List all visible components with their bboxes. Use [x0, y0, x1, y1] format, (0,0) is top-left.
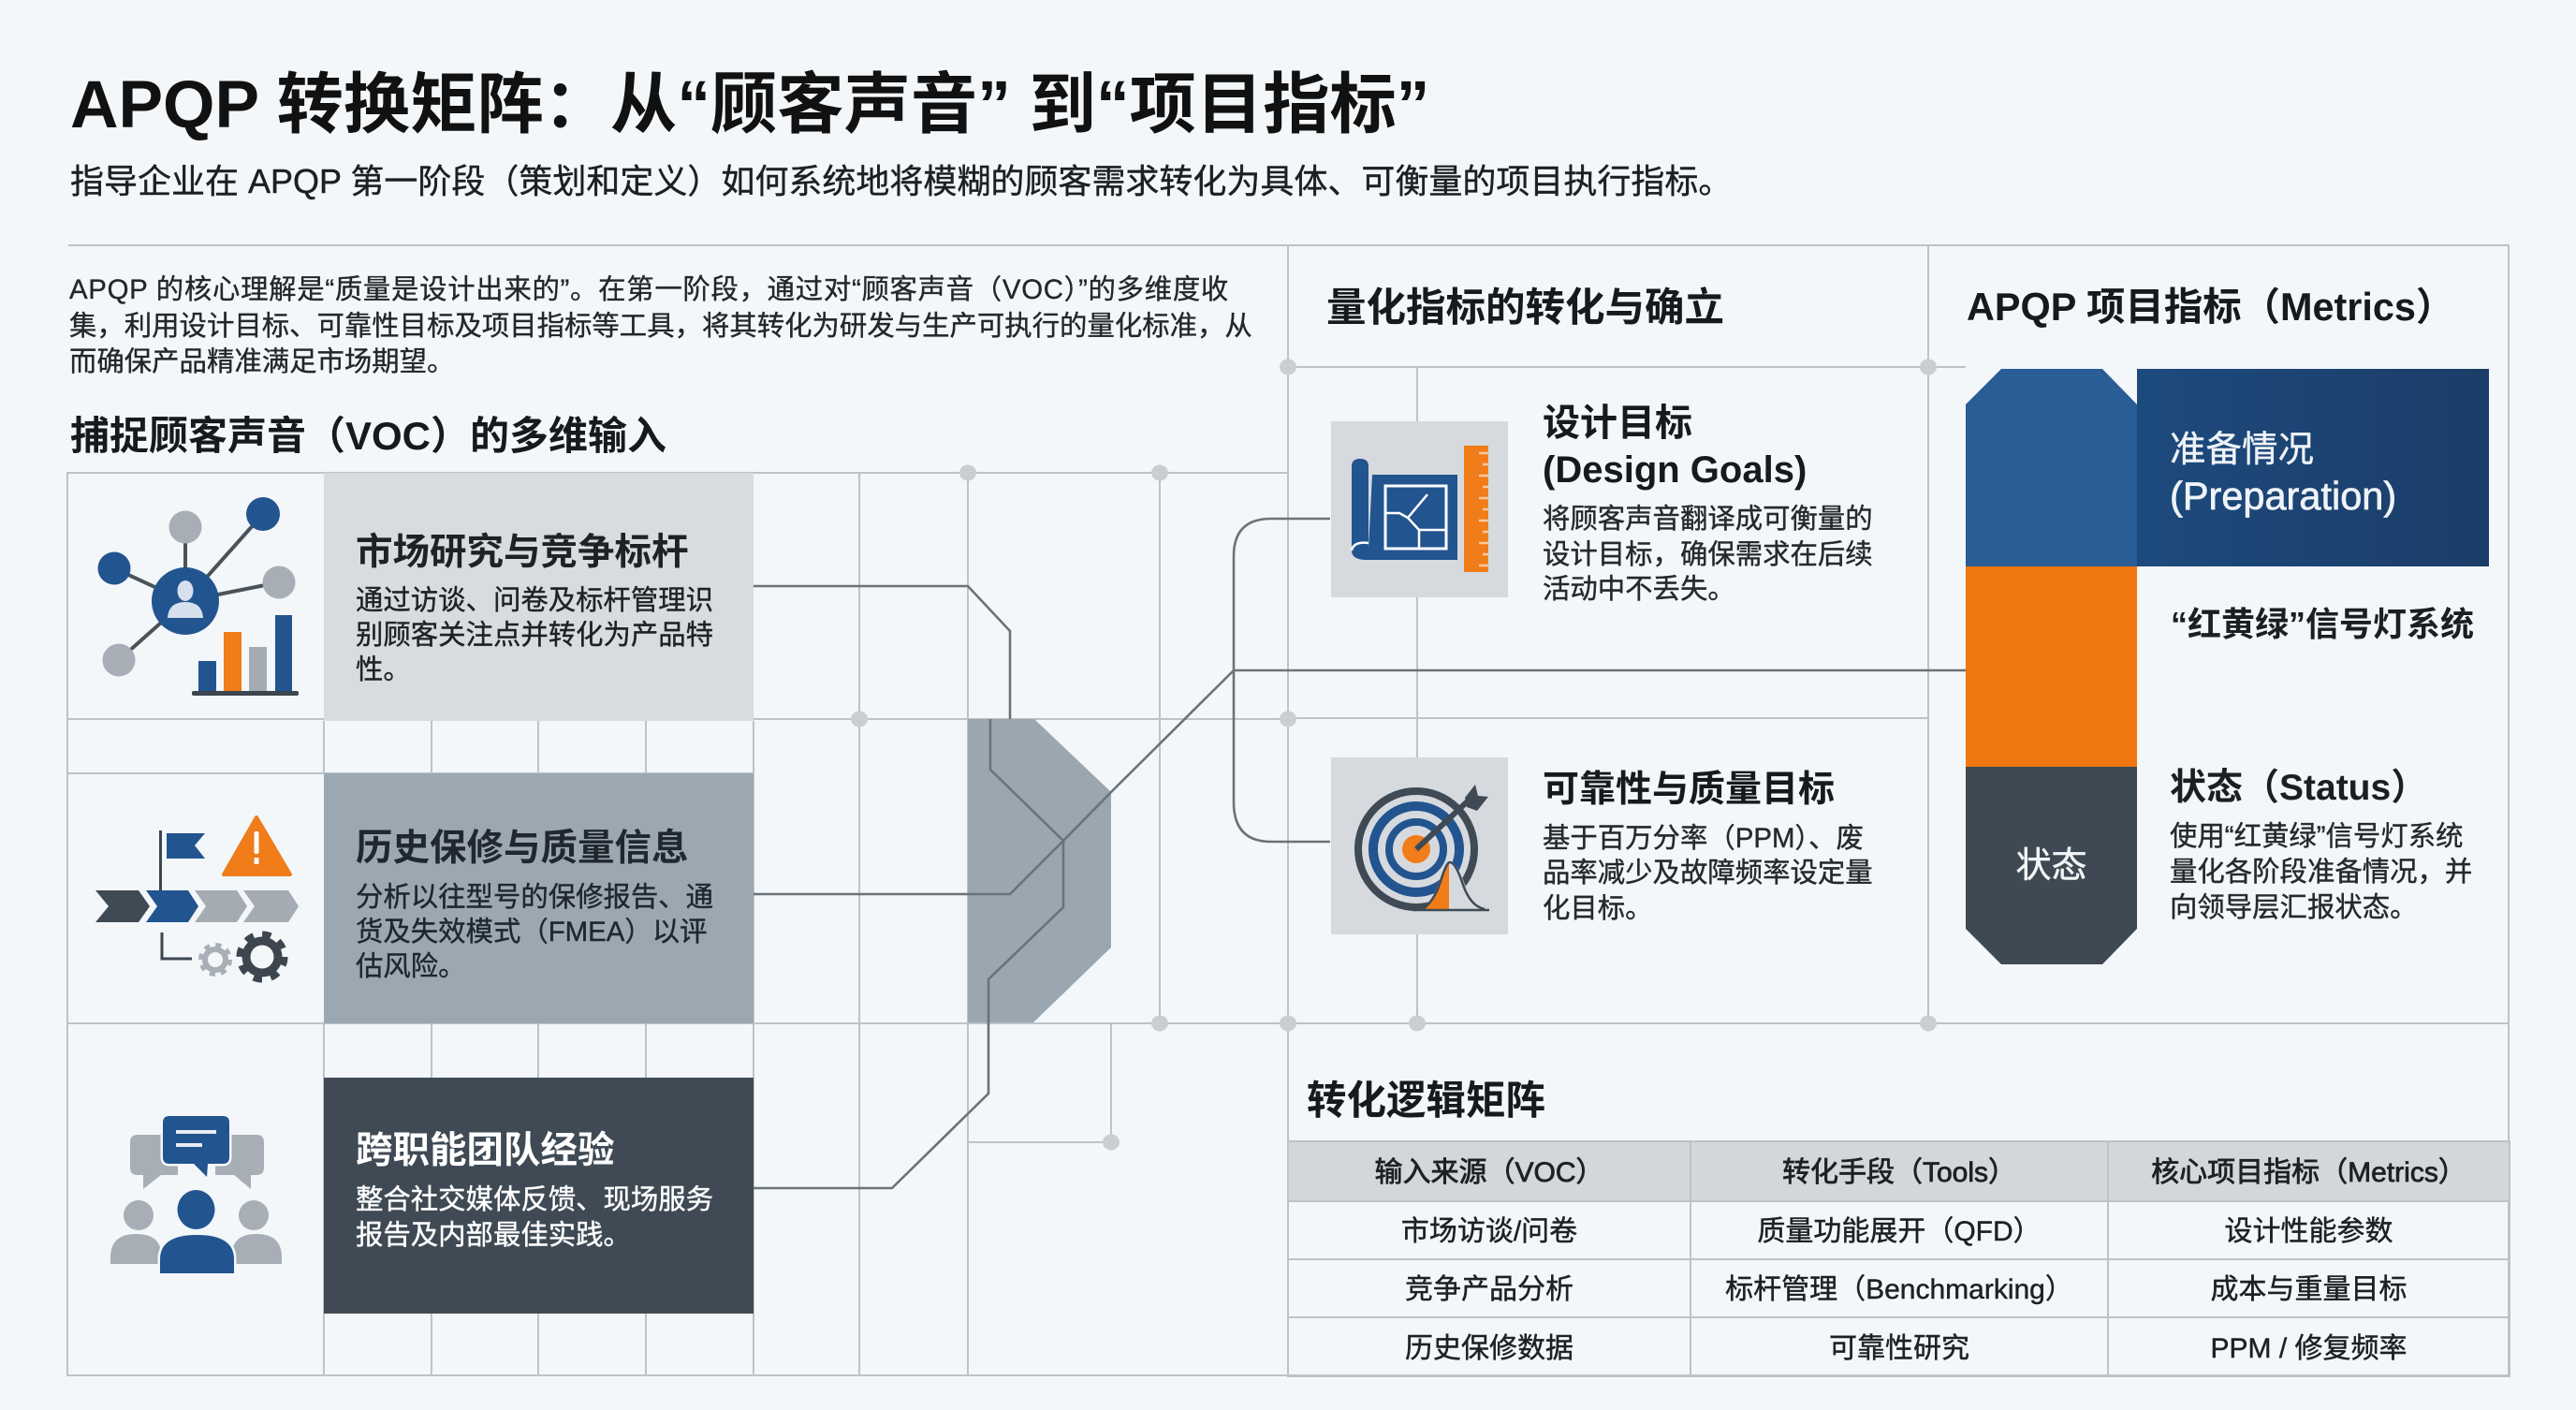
table header: 转化手段（Tools）	[1782, 1157, 2016, 1188]
label: status: 状态	[2015, 846, 2087, 886]
status body	[2170, 821, 2472, 923]
card title: 跨职能团队经验	[356, 1129, 614, 1170]
row: warranty	[1405, 1333, 2408, 1363]
intro paragraph: APQP 的核心理解是“质量是设计出来的”。在第一阶段，通过对“顾客声音（VOC）”的多维度收	[69, 274, 1229, 305]
label: preparation	[2170, 429, 2396, 518]
design goals title: (Design Goals)	[1543, 449, 1807, 491]
row: competition: 成本与重量目标	[2211, 1274, 2408, 1305]
heading: VOC inputs: 捕捉顾客声音（VOC）的多维输入	[70, 414, 666, 458]
intro paragraph: 而确保产品精准满足市场期望。	[69, 346, 454, 377]
heading: project metrics: APQP 项目指标（Metrics）	[1967, 286, 2454, 329]
status title: 状态（Status）	[2170, 768, 2427, 808]
label: traffic light system: “红黄绿”信号灯系统	[2171, 605, 2474, 643]
text: market research card	[356, 532, 713, 685]
status body: 量化各阶段准备情况，并	[2170, 857, 2472, 888]
row: competition: 竞争产品分析	[1405, 1274, 1573, 1305]
card body: 报告及内部最佳实践。	[356, 1219, 631, 1251]
row: market: 市场访谈/问卷	[1401, 1216, 1577, 1247]
heading: logic matrix: 转化逻辑矩阵	[1307, 1080, 1545, 1124]
table header: 输入来源（VOC）	[1374, 1157, 1604, 1188]
status body: 向领导层汇报状态。	[2170, 892, 2418, 923]
title: APQP 转换矩阵：从“顾客声音” 到“项目指标”	[70, 67, 1429, 142]
icon: blueprint	[1331, 421, 1508, 597]
reliability body: 基于百万分率（PPM）、废	[1543, 822, 1864, 854]
row: competition: 标杆管理（Benchmarking）	[1725, 1274, 2073, 1305]
row: competition	[1405, 1273, 2408, 1305]
card body: 整合社交媒体反馈、现场服务	[356, 1183, 713, 1215]
card body: 货及失效模式（FMEA）以评	[356, 917, 708, 947]
design goals body	[1543, 504, 1873, 605]
table header: 核心项目指标（Metrics）	[2151, 1157, 2466, 1188]
card: cross-functional team	[324, 1078, 754, 1314]
design goals body: 设计目标，确保需求在后续	[1543, 539, 1873, 569]
card body: 通过访谈、问卷及标杆管理识	[356, 584, 713, 616]
reliability body: 化目标。	[1543, 893, 1653, 923]
card body: 估风险。	[356, 951, 466, 982]
icon: network and bar chart	[97, 497, 299, 696]
row: warranty: PPM / 修复频率	[2210, 1333, 2408, 1363]
design goals body: 将顾客声音翻译成可衡量的	[1543, 504, 1873, 535]
row: market: 设计性能参数	[2224, 1216, 2393, 1247]
card title: 市场研究与竞争标杆	[356, 532, 689, 573]
reliability body: 品率减少及故障频率设定量	[1543, 858, 1873, 889]
card: warranty history	[324, 773, 754, 1023]
row: warranty: 可靠性研究	[1829, 1333, 1969, 1363]
card body	[356, 882, 713, 982]
card body: 别顾客关注点并转化为产品特	[356, 620, 713, 650]
card body	[356, 584, 713, 685]
logic matrix table	[1287, 1140, 2510, 1377]
table header	[1289, 1142, 2509, 1363]
row: warranty: 历史保修数据	[1405, 1333, 1573, 1363]
reliability title: 可靠性与质量目标	[1543, 770, 1835, 809]
icon: target with bell curve	[1331, 757, 1508, 934]
metrics column blocks	[1966, 369, 2489, 964]
design goals body: 活动中不丢失。	[1543, 574, 1735, 605]
row: market	[1401, 1215, 2393, 1247]
icon: team with speech bubbles	[110, 1116, 282, 1273]
card body	[356, 1183, 713, 1251]
label: preparation: 准备情况	[2170, 429, 2314, 470]
text: warranty card	[356, 828, 713, 982]
card title: 历史保修与质量信息	[356, 828, 689, 869]
subtitle: 指导企业在 APQP 第一阶段（策划和定义）如何系统地将模糊的顾客需求转化为具体、可衡量的项目执行指标。	[70, 161, 1732, 200]
heading: quantified metrics: 量化指标的转化与确立	[1326, 286, 1724, 330]
card: market research	[324, 473, 754, 721]
card body: 分析以往型号的保修报告、通	[356, 882, 713, 913]
status body: 使用“红黄绿”信号灯系统	[2170, 821, 2463, 852]
reliability body	[1543, 822, 1873, 923]
text: team card	[356, 1129, 713, 1251]
row: market: 质量功能展开（QFD）	[1757, 1216, 2042, 1247]
icon: timeline warning and gears	[95, 815, 299, 983]
design goals title	[1543, 403, 1807, 491]
label: preparation: (Preparation)	[2170, 474, 2396, 517]
text: design goals	[1543, 403, 1873, 605]
text: reliability goals	[1543, 770, 1873, 923]
text: status description	[2170, 768, 2472, 923]
card body: 性。	[356, 654, 411, 685]
design goals title: 设计目标	[1543, 403, 1692, 444]
intro paragraph	[69, 274, 1252, 377]
intro paragraph: 集，利用设计目标、可靠性目标及项目指标等工具，将其转化为研发与生产可执行的量化标准，从	[69, 311, 1252, 341]
